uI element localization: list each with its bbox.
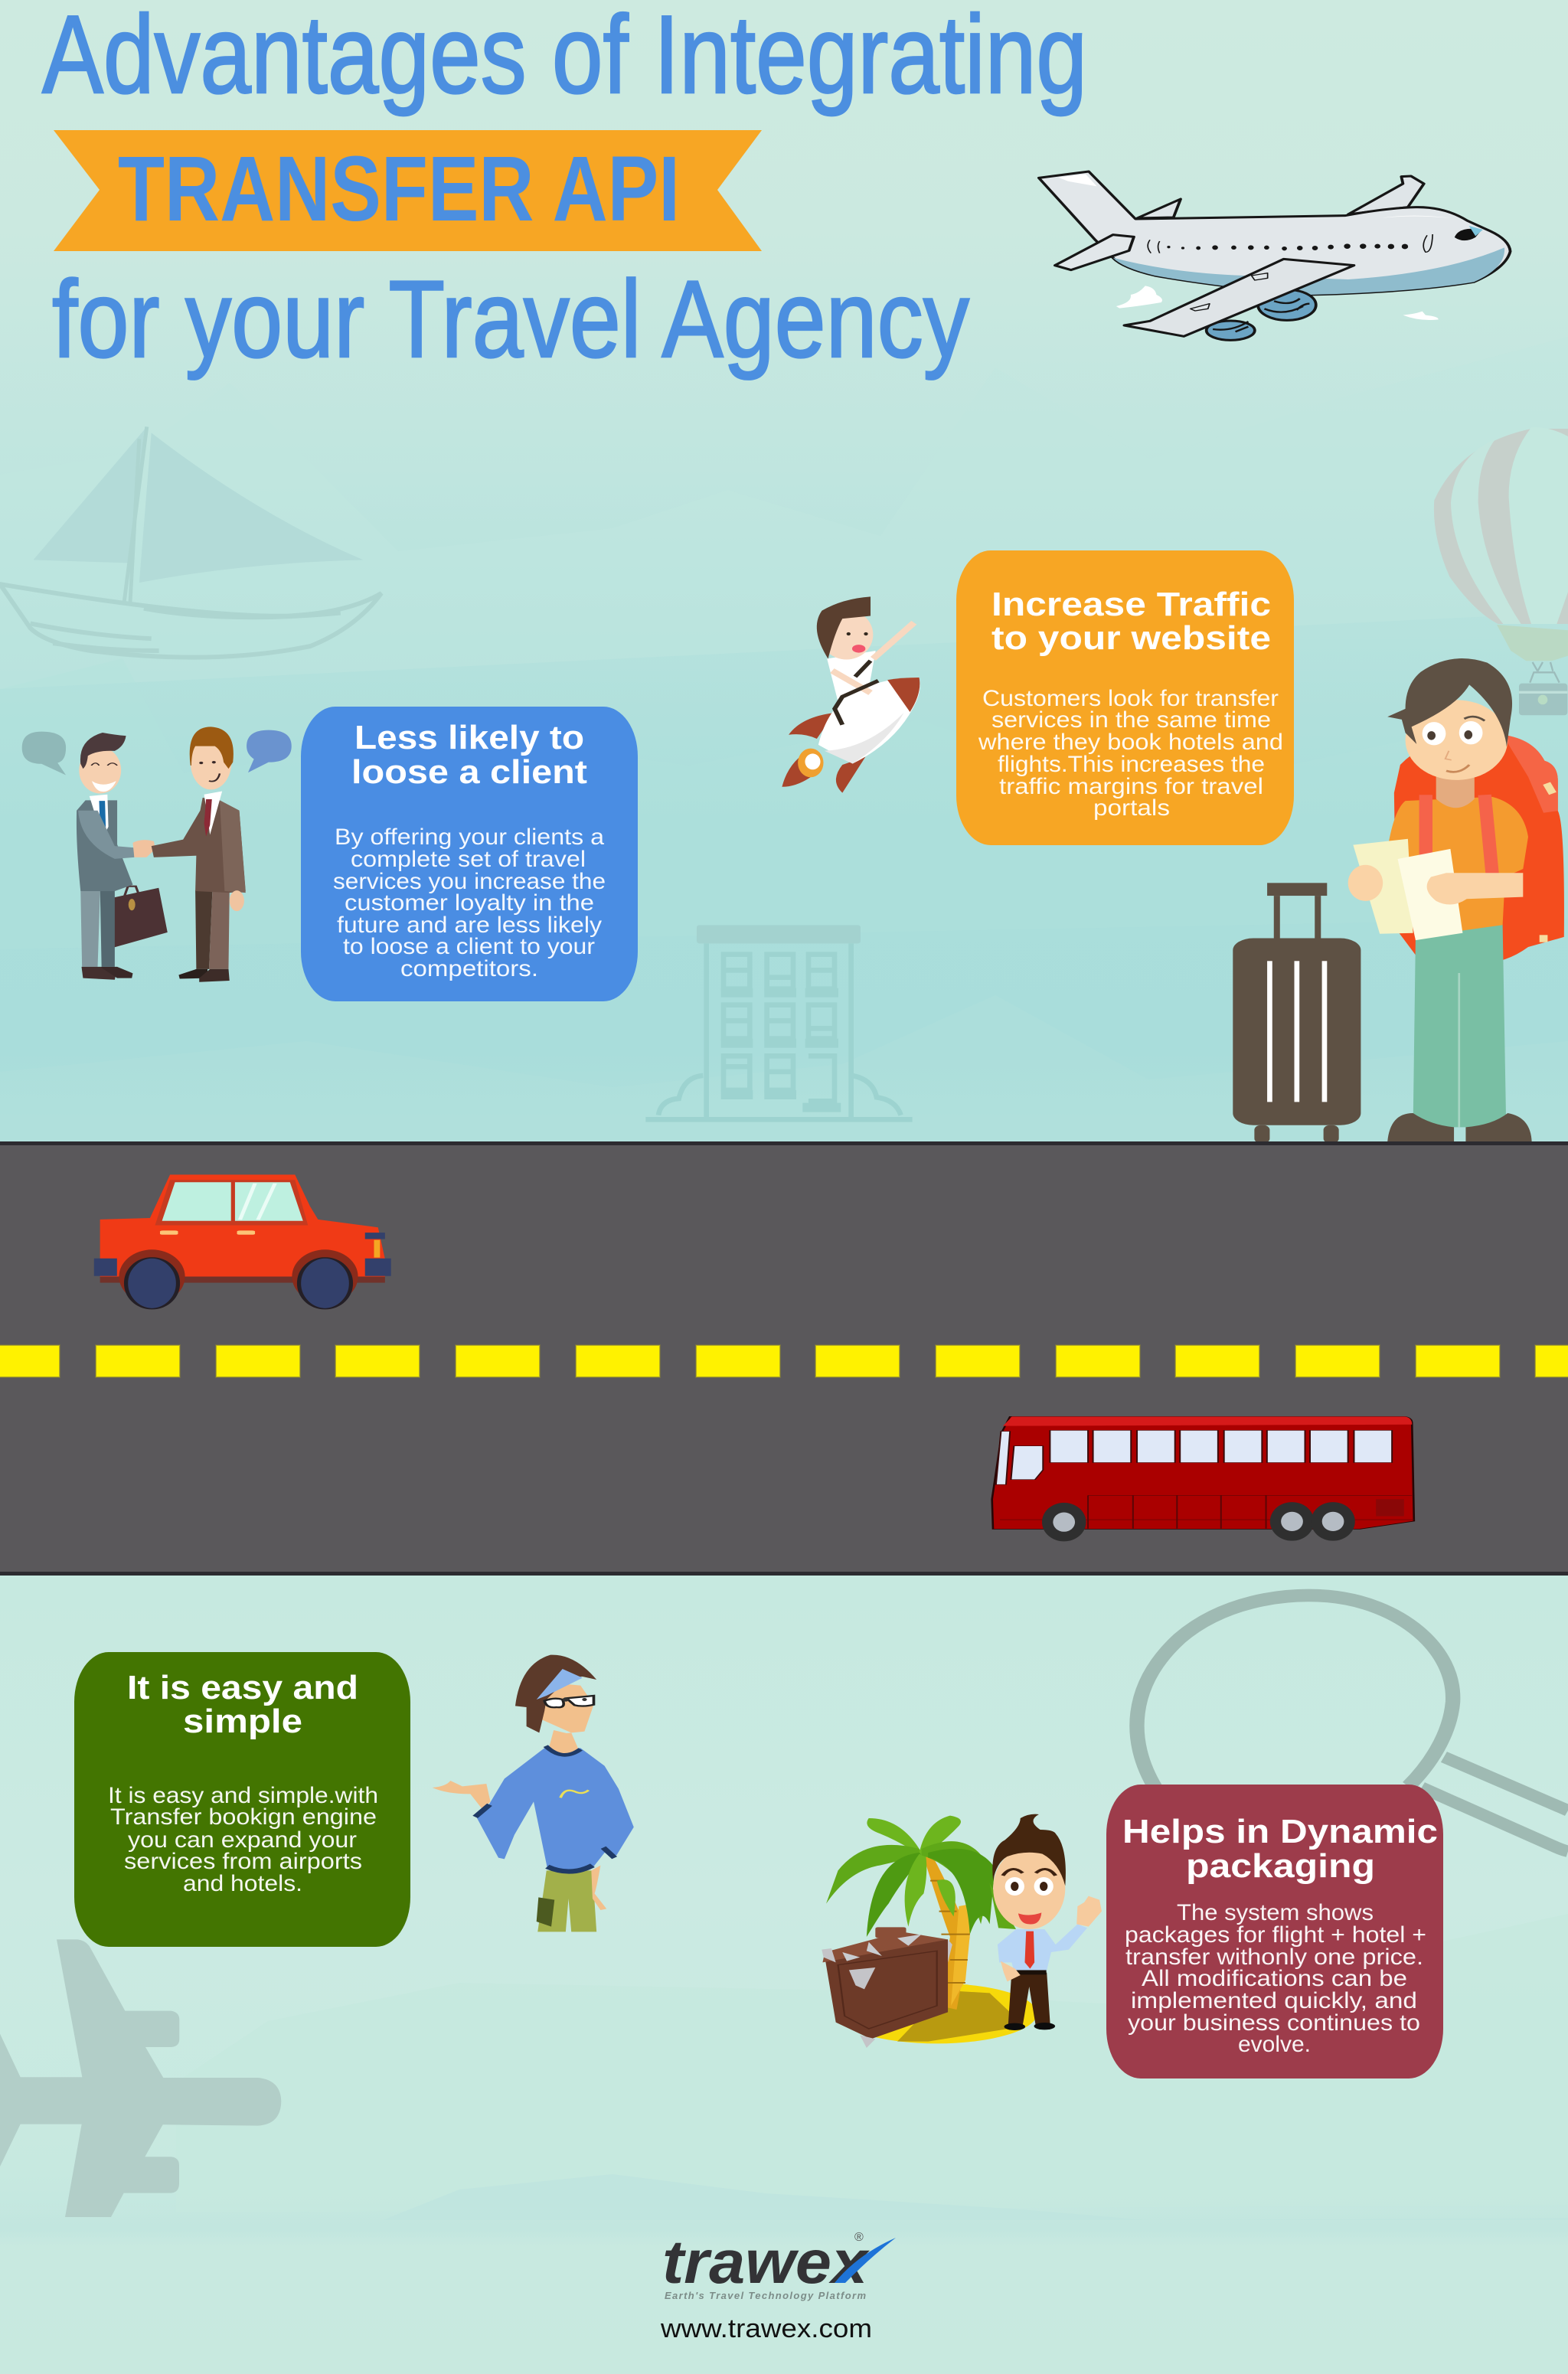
- speech bubble left: [22, 732, 66, 775]
- panel heading: Increase Traffic: [991, 586, 1271, 623]
- backpack: [1394, 733, 1564, 963]
- icon: two businessmen shaking hands: [22, 727, 292, 982]
- panel body text: services from airports: [124, 1849, 362, 1874]
- icon: man riding rocket: [782, 596, 920, 793]
- panel body text: services you increase the: [333, 869, 606, 894]
- logo: trawex: trawex: [662, 2228, 871, 2296]
- panel body text: customer loyalty in the: [345, 890, 594, 916]
- panel body text: you can expand your: [128, 1827, 357, 1853]
- panel heading: [351, 719, 587, 791]
- decoration: faded magnifying glass: [1137, 1595, 1568, 1851]
- banner text: TRANSFER API: [118, 136, 680, 240]
- panel body text: portals: [1093, 795, 1170, 821]
- panel: less likely to loose a client: [301, 707, 638, 1001]
- icon: traveller with suitcase and backpack: [1233, 658, 1564, 1143]
- panel: increase traffic to your website: [956, 550, 1294, 845]
- panel: it is easy and simple: [74, 1652, 410, 1947]
- panel body text: flights.This increases the: [998, 752, 1265, 777]
- suitcase: [822, 1927, 952, 2048]
- plane window dots: [1167, 243, 1408, 250]
- panel heading: simple: [183, 1703, 302, 1740]
- panel body text: services in the same time: [991, 707, 1271, 733]
- icon: island palm trees, suitcase and waving man: [822, 1814, 1102, 2048]
- panel body text: Transfer bookign engine: [110, 1804, 377, 1830]
- panel body text: The system shows: [1177, 1900, 1374, 1925]
- background: upper sky: [0, 0, 1568, 1145]
- panel heading: loose a client: [351, 753, 587, 791]
- road: [0, 1141, 1568, 1576]
- panel body text: It is easy and simple.with: [108, 1783, 378, 1808]
- panel body text: packages for flight + hotel +: [1125, 1922, 1426, 1948]
- logo swoosh: [835, 2238, 896, 2283]
- logo tagline: Earth's Travel Technology Platform: [665, 2290, 866, 2301]
- icon: red car: [94, 1174, 391, 1309]
- panel heading: [127, 1669, 358, 1740]
- panel body text: [333, 825, 606, 981]
- panel body text: transfer withonly one price.: [1125, 1945, 1423, 1970]
- title: for your Travel Agency: for your Travel Agency: [52, 259, 969, 380]
- panel body text: [978, 686, 1283, 821]
- panel body text: complete set of travel: [351, 847, 586, 872]
- decoration: faded hotel building: [645, 925, 913, 1120]
- palm trunks: [922, 1850, 970, 2010]
- banner: Transfer API ribbon: [54, 130, 762, 251]
- speech bubble right: [247, 730, 292, 772]
- decoration: faded hot air balloon: [1434, 427, 1568, 715]
- panel body text: [1125, 1900, 1426, 2057]
- panel body text: [108, 1783, 378, 1896]
- website url: www.trawex.com: [660, 2314, 872, 2343]
- panel body text: Customers look for transfer: [982, 686, 1279, 711]
- road centre dashes: [0, 1345, 1568, 1377]
- icon: cartoon airplane: [1039, 171, 1511, 340]
- panel heading: Helps in Dynamic: [1122, 1813, 1438, 1850]
- panel heading: packaging: [1186, 1847, 1375, 1885]
- panel body text: and hotels.: [183, 1871, 302, 1896]
- suitcase: [1233, 883, 1361, 1143]
- decoration: faded sailboat: [0, 426, 381, 658]
- logo registered mark: ®: [854, 2231, 864, 2244]
- decoration: faded airplane silhouette: [0, 1939, 281, 2217]
- panel body text: competitors.: [400, 956, 538, 981]
- panel heading: [991, 586, 1271, 657]
- small clouds: [1116, 286, 1439, 320]
- panel body text: future and are less likely: [337, 913, 602, 938]
- panel heading: Less likely to: [354, 719, 584, 756]
- panel body text: All modifications can be: [1142, 1966, 1407, 1991]
- panel body text: to loose a client to your: [343, 934, 595, 959]
- panel body text: By offering your clients a: [335, 825, 604, 850]
- background: lower sky: [0, 1574, 1568, 2374]
- panel heading: to your website: [991, 619, 1271, 657]
- waving man: [992, 1814, 1102, 2030]
- panel body text: traffic margins for travel: [999, 774, 1263, 799]
- panel heading: [1122, 1813, 1438, 1885]
- panel: helps in dynamic packaging: [1106, 1785, 1443, 2078]
- panel body text: implemented quickly, and: [1131, 1988, 1417, 2013]
- icon: man with glasses presenting: [433, 1655, 634, 1932]
- panel body text: your business continues to: [1128, 2010, 1420, 2036]
- panel heading: It is easy and: [127, 1669, 358, 1706]
- panel body text: evolve.: [1238, 2032, 1311, 2057]
- icon: red bus: [992, 1416, 1414, 1541]
- palm leaves: [826, 1816, 1016, 1937]
- panel body text: where they book hotels and: [978, 730, 1283, 755]
